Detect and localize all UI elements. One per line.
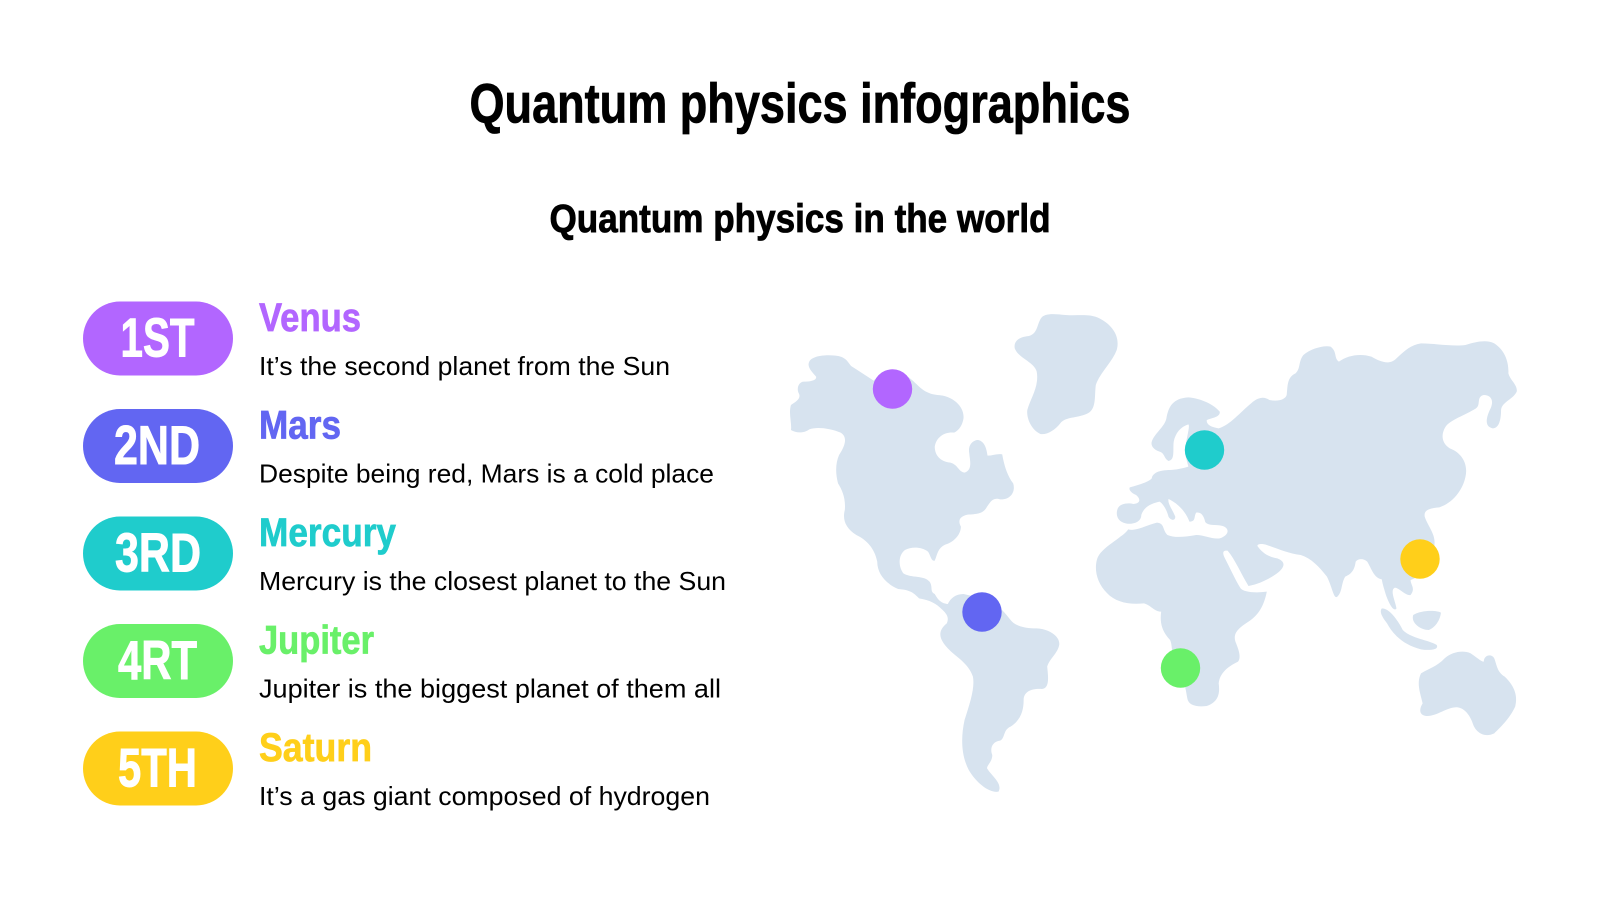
row: Mars — [83, 404, 714, 488]
marker: Jupiter, green — [1161, 648, 1200, 688]
subtitle: Quantum physics in the world — [550, 197, 1050, 241]
row: Mercury — [83, 511, 726, 596]
name: Mercury: Mercury — [259, 511, 397, 555]
row: Venus — [83, 296, 670, 381]
landmass: Eurasia and Africa — [1096, 341, 1517, 706]
description: Venus: It’s the second planet from the Sun — [259, 351, 670, 381]
world map — [790, 314, 1517, 792]
ranking list — [83, 296, 726, 811]
description: Jupiter: Jupiter is the biggest planet of them all — [259, 674, 721, 704]
marker: Saturn, yellow — [1400, 539, 1440, 579]
badge: 4RT — [83, 624, 233, 698]
badge: 1ST — [83, 302, 233, 376]
name: Mars: Mars — [259, 404, 341, 448]
marker: Mercury, teal — [1185, 430, 1224, 470]
description: Mercury: Mercury is the closest planet to the Sun — [259, 566, 726, 596]
landmass: Australia — [1419, 652, 1516, 735]
title: Quantum physics infographics — [470, 72, 1130, 134]
badge: 3RD — [83, 516, 233, 590]
map: continents — [790, 314, 1517, 792]
landmass: Borneo — [1413, 611, 1441, 630]
badge: 2ND: 2ND — [114, 414, 200, 476]
badge: 2ND — [83, 409, 233, 483]
badge: 3RD: 3RD — [115, 522, 201, 584]
badge: 1ST: 1ST — [120, 306, 194, 368]
landmass: Greenland — [1015, 314, 1118, 434]
marker: Mars, blue — [962, 592, 1002, 632]
name: Jupiter: Jupiter — [259, 618, 374, 662]
marker: Venus, purple — [873, 369, 912, 409]
row: Saturn — [83, 726, 710, 811]
landmass: the Americas — [790, 355, 1059, 792]
name: Saturn: Saturn — [259, 726, 372, 770]
badge: 4RT: 4RT — [118, 629, 197, 691]
badge: 5TH — [83, 732, 233, 806]
row: Jupiter — [83, 618, 721, 704]
name: Venus: Venus — [259, 296, 361, 340]
badge: 5TH: 5TH — [118, 736, 197, 798]
description: Mars: Despite being red, Mars is a cold place — [259, 458, 714, 488]
description: Saturn: It’s a gas giant composed of hydrogen — [259, 781, 710, 811]
landmass: Indonesia — [1381, 608, 1437, 650]
